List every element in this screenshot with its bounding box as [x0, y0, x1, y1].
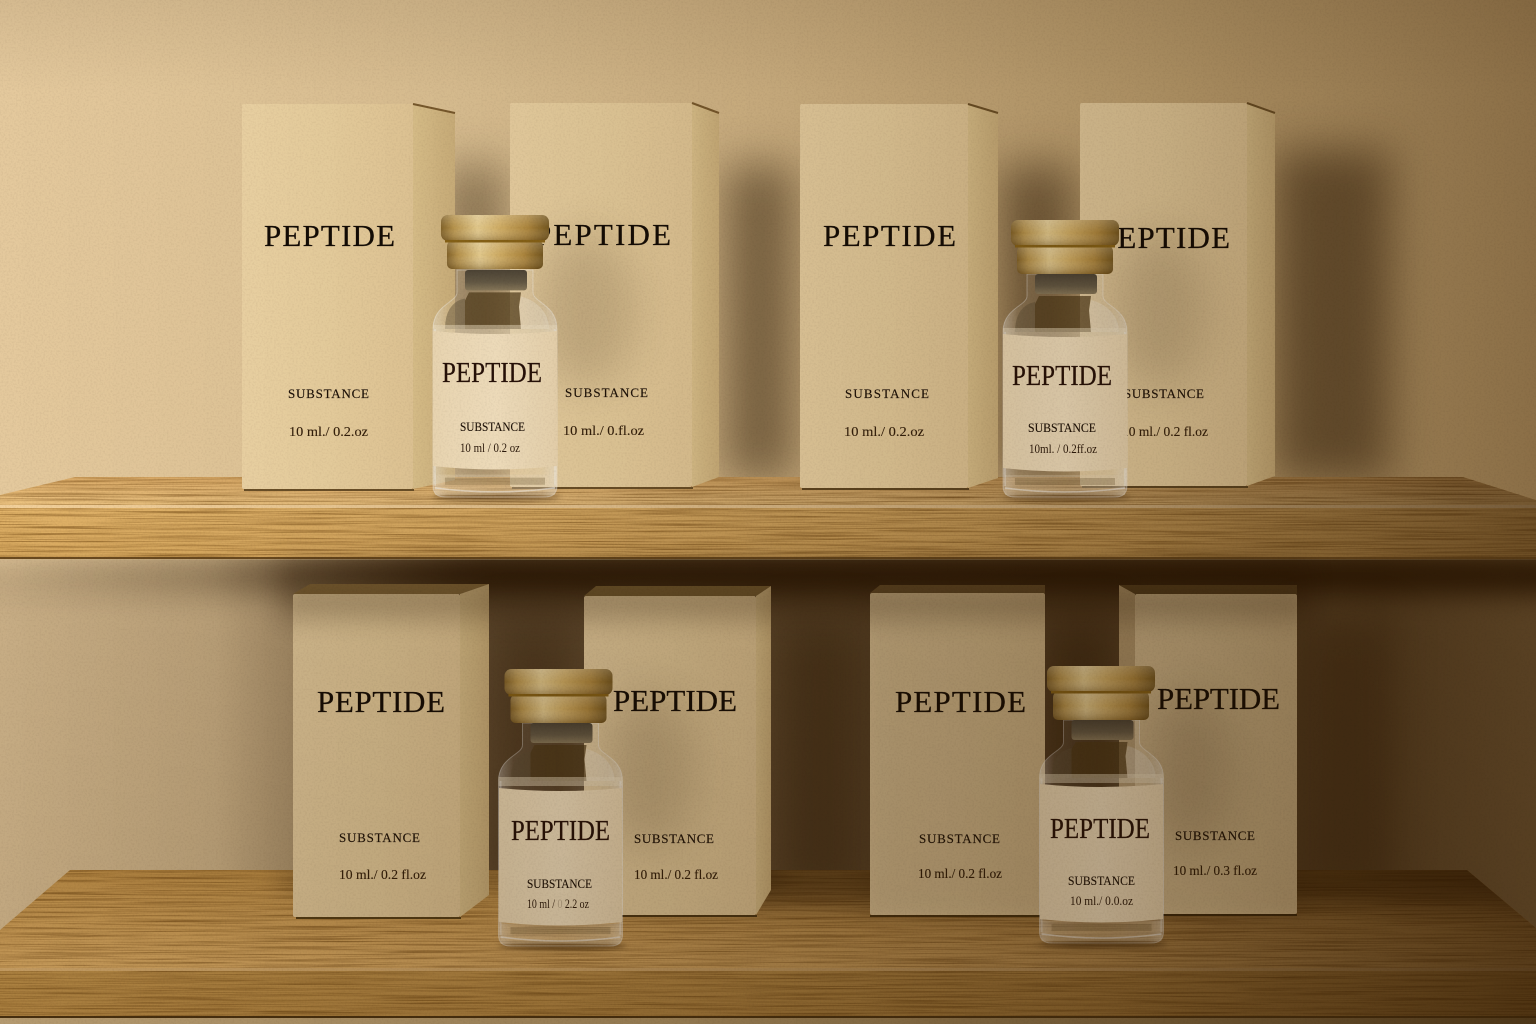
vial 2 label: 10ml. / 0.2ff.oz — [1029, 441, 1097, 456]
vial 1 label: 10 ml / 0.2 oz — [460, 440, 520, 455]
vial 3 label — [499, 788, 622, 926]
box 5 text: 10 ml./ 0.2 fl.oz — [339, 868, 426, 883]
box 4 text: SUBSTANCE — [1124, 386, 1204, 401]
box 5 text: SUBSTANCE — [339, 830, 420, 845]
bottom right box dimming — [860, 590, 1310, 920]
vial 3 gold cap — [504, 669, 612, 723]
box 6 text: PEPTIDE — [613, 683, 737, 718]
box 5 text — [317, 684, 445, 883]
vial 4 gold cap — [1047, 666, 1155, 720]
box 1 text: 10 ml./ 0.2.oz — [289, 425, 368, 440]
box 8 text: SUBSTANCE — [1175, 828, 1255, 843]
box 1 text: SUBSTANCE — [288, 386, 369, 401]
box 1 text — [264, 218, 395, 440]
box 2 text: PEPTIDE — [534, 217, 671, 252]
box 4 text: 10 ml./ 0.2 fl.oz — [1122, 425, 1208, 440]
bottom shelf surface — [0, 870, 1536, 970]
box 3 text: SUBSTANCE — [845, 386, 929, 401]
box 6 text: 10 ml./ 0.2 fl.oz — [634, 868, 718, 883]
box 8 text: PEPTIDE — [1157, 681, 1280, 716]
vial shadow on box 8 — [1148, 690, 1232, 850]
bottom row overhead shade — [280, 560, 1310, 620]
box 5 — [293, 584, 489, 919]
box 8 text: 10 ml./ 0.3 fl.oz — [1173, 864, 1257, 879]
vial 4 glass — [1040, 720, 1164, 943]
vial 2 — [1003, 220, 1127, 497]
box 3 text — [823, 218, 956, 440]
vial 3 label: 10 ml / 0 2.2 oz — [527, 896, 589, 911]
box 1 text: PEPTIDE — [264, 218, 395, 253]
box 2 text: 10 ml./ 0.fl.oz — [563, 424, 644, 439]
box 7 text: SUBSTANCE — [919, 831, 1000, 846]
vial 2 gold cap — [1011, 220, 1119, 274]
vial 3 — [498, 669, 622, 946]
box 7 text — [895, 684, 1026, 882]
vial 2 label — [1003, 334, 1127, 472]
bottom shelf front edge — [0, 970, 1536, 1017]
vial shadow on box 2 — [535, 230, 635, 390]
vial 1 — [433, 215, 557, 497]
vial 4 label: PEPTIDE — [1050, 813, 1150, 845]
box 3 text: 10 ml./ 0.2.oz — [844, 425, 924, 440]
top shelf — [0, 477, 1536, 559]
box 7 — [870, 585, 1045, 917]
vial 1 glass — [433, 270, 557, 497]
cast shadows on wall — [0, 150, 1536, 960]
top shelf front edge — [0, 508, 1536, 558]
vial 4 label — [1040, 784, 1163, 922]
vial 1 gold cap — [441, 215, 549, 269]
box 2 text: SUBSTANCE — [565, 385, 648, 400]
box 4 text — [1099, 220, 1230, 440]
box 6 text — [613, 683, 737, 883]
vial shadow on box 6 — [605, 690, 695, 850]
box 8 text — [1157, 681, 1280, 879]
bottom shelf — [0, 855, 1536, 1024]
vial shadow on box 4 — [1115, 230, 1205, 390]
box 4 text: PEPTIDE — [1099, 220, 1230, 255]
vial 2 label: SUBSTANCE — [1028, 421, 1096, 435]
box 6 — [584, 586, 771, 917]
vial 1 label: PEPTIDE — [442, 357, 542, 389]
vial 3 label: SUBSTANCE — [527, 877, 592, 891]
box 3 — [800, 104, 998, 490]
vial 4 label: 10 ml./ 0.0.oz — [1070, 893, 1133, 908]
vial 2 glass — [1003, 274, 1127, 497]
vial 2 label: PEPTIDE — [1012, 360, 1112, 392]
box 7 text: PEPTIDE — [895, 684, 1026, 719]
box 2 — [510, 103, 719, 489]
vial 4 label: SUBSTANCE — [1068, 874, 1135, 888]
vial shadows on shelves — [433, 493, 1167, 950]
box 6 text: SUBSTANCE — [634, 831, 714, 846]
box 7 text: 10 ml./ 0.2 fl.oz — [918, 867, 1002, 882]
top shelf surface — [0, 477, 1536, 508]
box 4 — [1080, 103, 1275, 488]
box 2 text — [534, 217, 671, 439]
box 3 text: PEPTIDE — [823, 218, 956, 253]
box 1 — [242, 104, 455, 491]
vial 3 label: PEPTIDE — [511, 815, 610, 847]
box 8 — [1119, 585, 1297, 916]
vial 4 — [1040, 666, 1164, 943]
vial 3 glass — [498, 723, 622, 946]
vial 1 label: SUBSTANCE — [460, 420, 525, 434]
box 5 text: PEPTIDE — [317, 684, 445, 719]
vial 1 label — [433, 331, 557, 470]
